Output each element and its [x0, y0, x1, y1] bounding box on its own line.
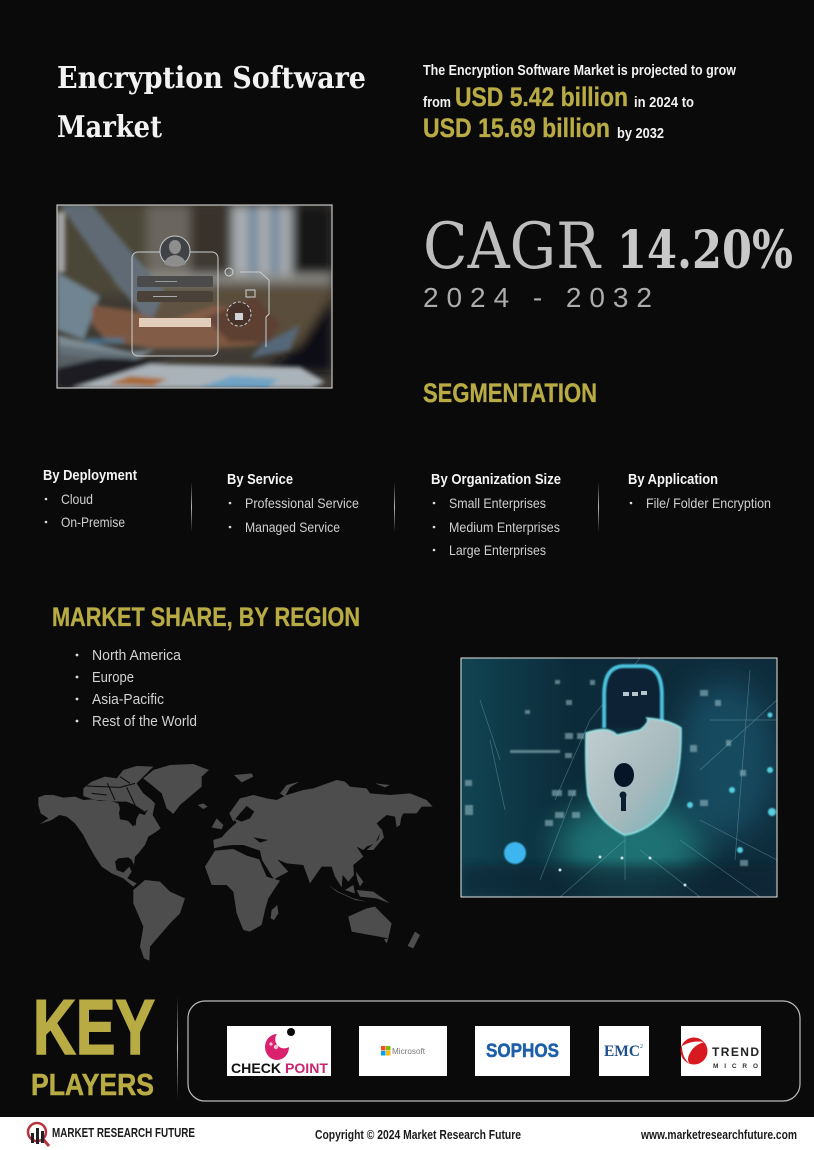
region list: Asia-Pacific — [92, 691, 164, 708]
world map — [38, 764, 433, 961]
market size summary — [423, 63, 737, 143]
market size summary: USD 5.42 billion — [455, 82, 628, 112]
footer: Copyright © 2024 Market Research Future — [315, 1127, 521, 1142]
icon: market research future logo — [28, 1123, 49, 1146]
segment: by organization size: By Organization Size — [431, 471, 561, 488]
segment: by application — [628, 471, 771, 511]
photo: glowing padlock — [461, 658, 777, 897]
segment: by service: Professional Service — [245, 495, 359, 511]
segment: by deployment: By Deployment — [43, 467, 137, 484]
segment: by organization size: Large Enterprises — [449, 542, 546, 558]
photo: hands on laptop with login interface — [57, 205, 332, 388]
market size summary: USD 15.69 billion — [423, 113, 610, 143]
segment: by service: Managed Service — [245, 519, 340, 535]
logo: trend micro — [680, 1026, 761, 1076]
title — [57, 61, 366, 145]
logo: sophos — [475, 1026, 570, 1076]
CAGR period: 2024 - 2032 — [423, 282, 652, 313]
segment: by deployment: Cloud — [61, 491, 93, 507]
segment: by organization size — [431, 471, 561, 558]
key players heading: KEY — [33, 983, 155, 1071]
segment: by organization size: Small Enterprises — [449, 495, 546, 511]
title: Encryption Software — [57, 61, 366, 96]
CAGR value — [423, 210, 793, 284]
region list: Europe — [92, 669, 134, 686]
key players heading: PLAYERS — [31, 1067, 154, 1102]
market size summary: from — [423, 95, 451, 111]
logo: sophos: SOPHOS — [486, 1041, 559, 1062]
market size summary: by 2032 — [617, 126, 664, 142]
logo: trend micro: MICRO — [713, 1063, 758, 1070]
market size summary: The Encryption Software Market is projected to grow — [423, 63, 737, 79]
segmentation heading: SEGMENTATION — [423, 378, 597, 408]
segment: by deployment: On-Premise — [61, 514, 125, 530]
footer: MARKET RESEARCH FUTURE — [52, 1125, 195, 1140]
key players panel — [188, 1001, 800, 1101]
segment: by organization size: Medium Enterprises — [449, 519, 560, 535]
region list — [76, 647, 197, 730]
logo: microsoft — [359, 1026, 447, 1076]
region list: Rest of the World — [92, 713, 197, 730]
market share heading: MARKET SHARE, BY REGION — [52, 602, 360, 632]
logo: microsoft: Microsoft — [392, 1046, 426, 1056]
region list: North America — [92, 647, 182, 664]
logo: check point: CHECK POINT — [231, 1061, 329, 1076]
segment: by deployment — [43, 467, 137, 530]
title: Market — [57, 110, 162, 145]
segment: by application: By Application — [628, 471, 718, 488]
logo: emc: EMC — [604, 1043, 640, 1060]
segment: by service — [227, 471, 359, 535]
key players heading — [31, 983, 155, 1102]
segment: by service: By Service — [227, 471, 293, 488]
logo: check point — [227, 1026, 331, 1076]
segment: by application: File/ Folder Encryption — [646, 495, 771, 511]
logo: emc — [599, 1026, 649, 1076]
logo: emc: 2 — [640, 1044, 643, 1050]
footer — [0, 1117, 814, 1150]
logo: trend micro: TREND — [712, 1045, 759, 1059]
market size summary: in 2024 to — [634, 95, 694, 111]
CAGR value: CAGR — [423, 210, 602, 284]
